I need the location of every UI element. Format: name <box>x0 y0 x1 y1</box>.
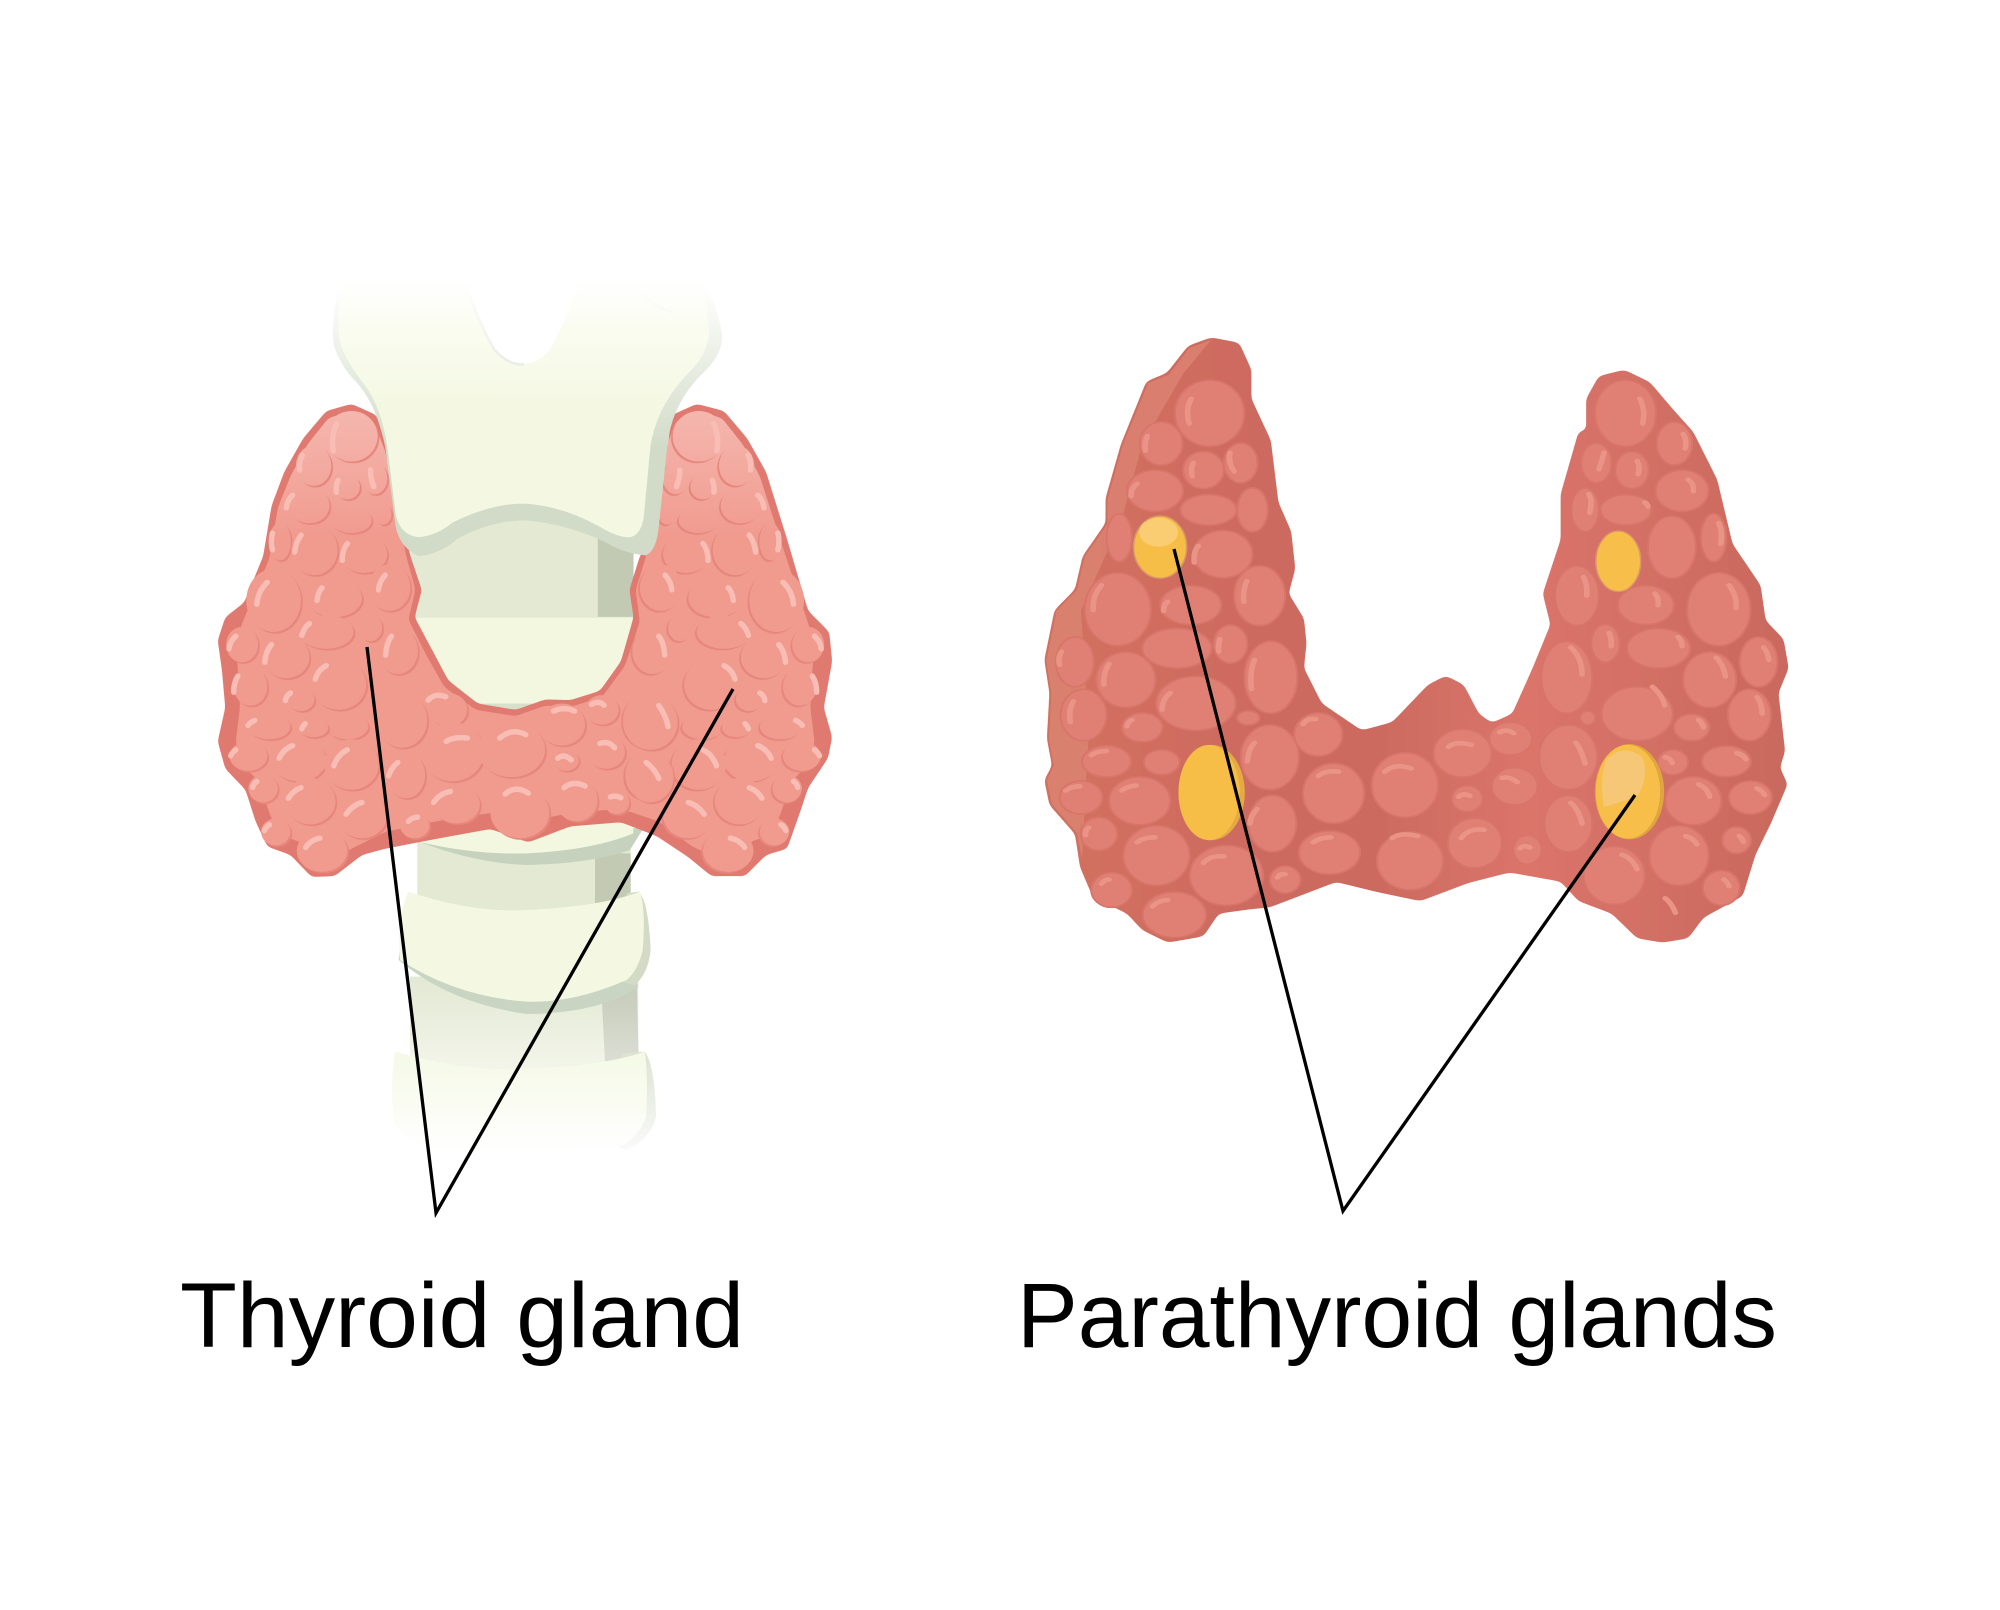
leader lines: thyroid gland <box>367 647 733 1213</box>
label: thyroid gland: Thyroid gland <box>180 1265 744 1367</box>
gland body <box>1044 337 1789 943</box>
parathyroid gland: lower right <box>1595 744 1664 839</box>
lighter left edge of gland <box>1046 340 1211 859</box>
thyroid gland lobes and isthmus <box>218 404 832 877</box>
parathyroid gland: upper right <box>1596 531 1641 591</box>
leader lines: parathyroid glands <box>1174 549 1635 1211</box>
lower trachea rings <box>392 817 656 1154</box>
follicles <box>1056 380 1777 938</box>
thyroid diagram <box>218 278 832 1154</box>
parathyroid diagram <box>1044 337 1789 943</box>
isthmus follicles <box>400 693 678 838</box>
parathyroid gland: upper left <box>1134 516 1187 578</box>
upper trachea behind gland <box>410 497 634 714</box>
label: parathyroid glands: Parathyroid glands <box>1017 1265 1777 1367</box>
thyroid cartilage shield <box>333 278 722 556</box>
parathyroid gland: lower left <box>1178 745 1245 840</box>
